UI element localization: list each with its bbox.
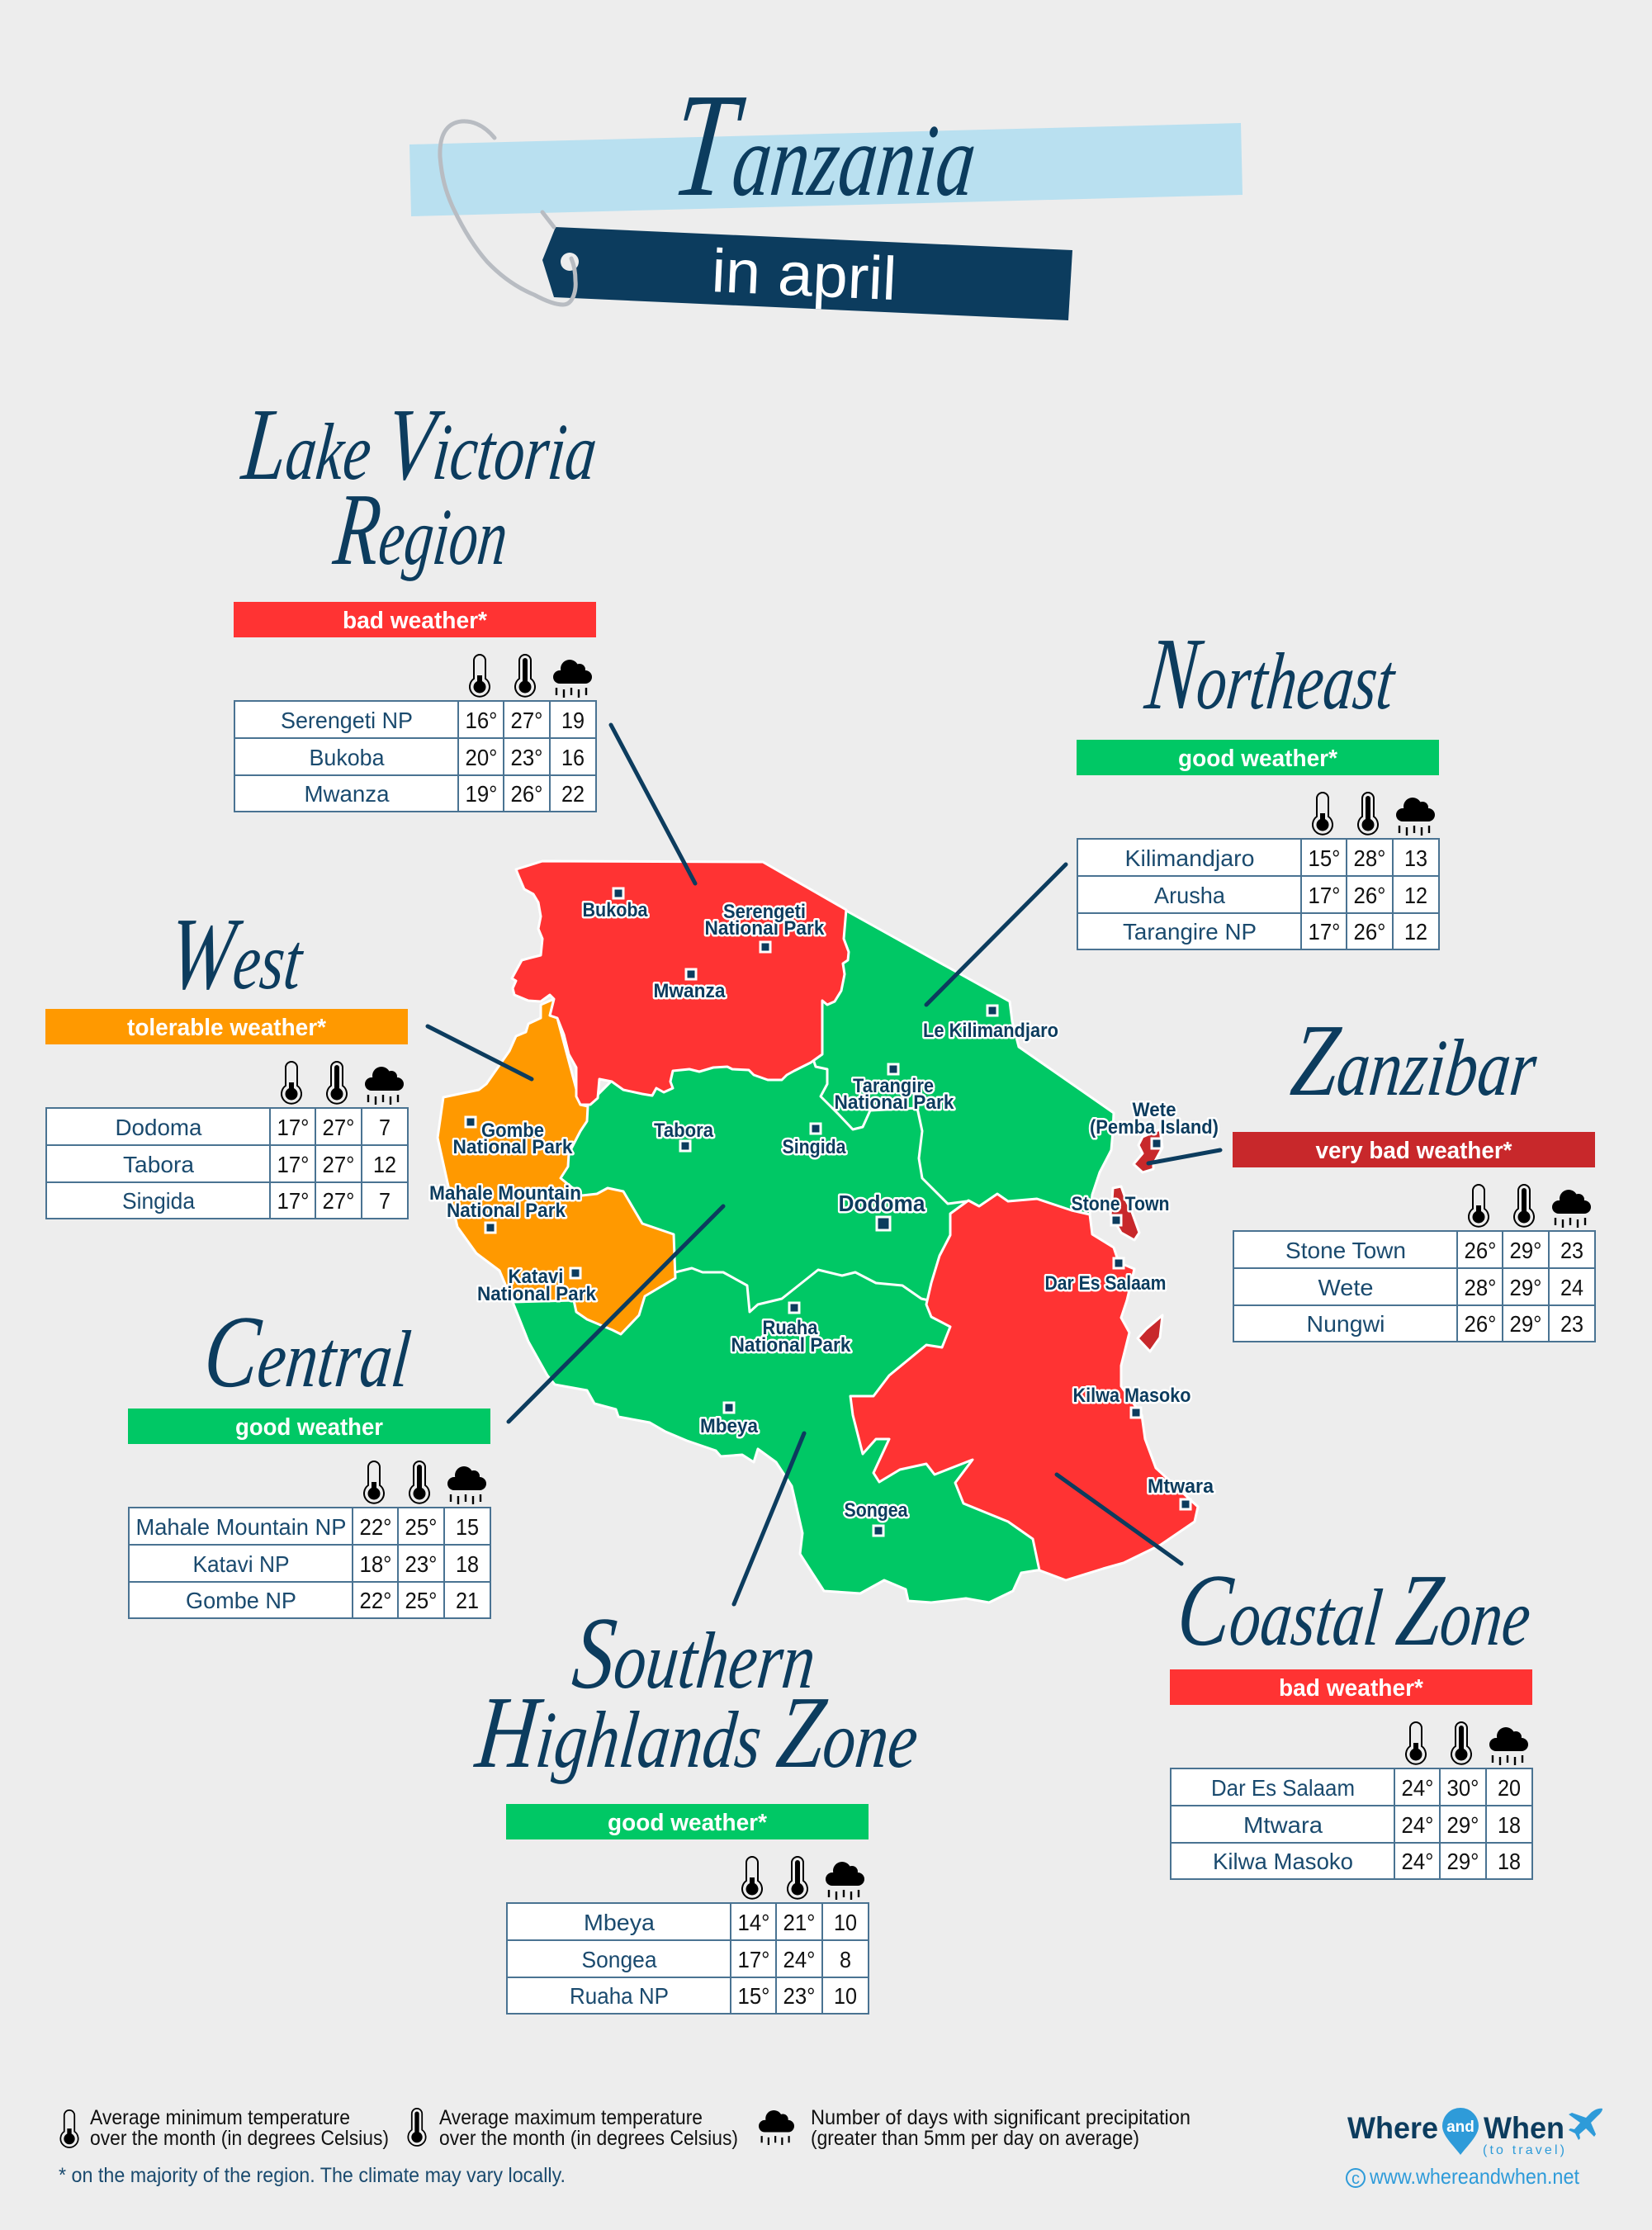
table: 25° (405, 1588, 438, 1613)
table: 27° (322, 1188, 355, 1214)
table: 20 (1498, 1775, 1521, 1801)
table: 17° (277, 1188, 309, 1214)
city: Katavi National Park: Katavi (509, 1266, 563, 1288)
heading: Zanzibar: Zanzibar (1286, 1003, 1543, 1118)
table: 15 (456, 1514, 479, 1540)
region borders: green inner (675, 1059, 967, 1312)
map of Tanzania (429, 861, 1219, 1603)
heading: Central: Central (199, 1295, 417, 1409)
city: Tarangire National Park (834, 1064, 954, 1114)
logo: Where and When (1347, 2108, 1602, 2189)
arrow: Lake Victoria (611, 725, 695, 883)
heading: Coastal Zone: Coastal Zone (1172, 1553, 1537, 1668)
tag hole (561, 253, 579, 271)
city: Stone Town: Stone Town (1072, 1193, 1169, 1215)
city: Wete: Wete (1133, 1099, 1176, 1121)
table: 22 (561, 781, 585, 807)
legend text: rain days (811, 2106, 1190, 2150)
legend text: rain days: (greater than 5mm per day on average) (811, 2127, 1139, 2150)
table: Kilimandjaro (1124, 845, 1255, 871)
table: 17° (277, 1152, 309, 1177)
title block (409, 63, 1243, 320)
footnote: * on the majority of the region. The climate may vary locally. (59, 2164, 566, 2187)
title: Tanzania: Tanzania (665, 63, 986, 228)
table: 16° (466, 708, 497, 733)
panel: Zanzibar (1233, 1132, 1595, 1342)
heading: Southern Highlands Zone: Highlands Zone (470, 1675, 925, 1790)
table: 14° (738, 1910, 769, 1935)
table: 10 (834, 1910, 857, 1935)
table: 17° (1308, 883, 1341, 908)
logo word: Where: Where (1347, 2111, 1438, 2145)
legend text: maximum temperature: over the month (in degrees Celsius) (439, 2127, 738, 2150)
table: 10 (834, 1983, 857, 2009)
icon: minimum temperature (60, 2110, 78, 2147)
city: Gombe National Park: National Park (452, 1136, 573, 1158)
table: Mtwara (1243, 1812, 1323, 1838)
table: 22° (360, 1588, 391, 1613)
table: 20° (466, 745, 497, 770)
city: Dodoma: Dodoma (839, 1191, 925, 1216)
icon: plane (1569, 2109, 1602, 2140)
table: Singida (122, 1188, 195, 1214)
table: 23 (1560, 1238, 1583, 1263)
rating banner (1233, 1132, 1595, 1167)
city: Singida (783, 1124, 846, 1158)
website: www.whereandwhen.net (1369, 2164, 1580, 2189)
table: Mahale Mountain NP (135, 1514, 347, 1540)
table: 18 (1498, 1812, 1521, 1838)
region: coastal red (850, 1194, 1198, 1580)
region: lake victoria red (512, 861, 849, 1105)
table: Dodoma (116, 1115, 202, 1140)
heading: Lake Victoria Region (237, 387, 604, 587)
table: 30° (1446, 1775, 1479, 1801)
table: Tabora (123, 1152, 194, 1177)
rating banner (128, 1409, 490, 1444)
logo tagline: (to travel) (1483, 2143, 1564, 2157)
heading: Southern Highlands Zone (470, 1596, 925, 1790)
city: Ruaha National Park: National Park (731, 1334, 851, 1356)
table: Tarangire NP (1123, 919, 1257, 945)
table (1171, 1768, 1532, 1879)
table (46, 1108, 408, 1219)
city: Dar Es Salaam (1045, 1258, 1166, 1295)
table: Ruaha NP (570, 1983, 669, 2009)
table: 29° (1446, 1812, 1479, 1838)
table: 18 (1498, 1849, 1521, 1874)
table: 26° (1354, 919, 1385, 945)
table: 12 (373, 1152, 396, 1177)
rating banner: good weather (235, 1414, 383, 1441)
icons (1313, 793, 1435, 836)
heading: Northeast: Northeast (1140, 617, 1403, 731)
table: 12 (1404, 919, 1427, 945)
legend (59, 2106, 1190, 2187)
luggage tag (542, 227, 1072, 320)
table: 12 (1404, 883, 1427, 908)
table: Kilwa Masoko (1213, 1849, 1353, 1874)
arrow: Zanzibar (1148, 1150, 1220, 1163)
table: Arusha (1154, 883, 1225, 908)
rating banner: bad weather* (1279, 1675, 1424, 1702)
table: 7 (379, 1188, 391, 1214)
city: Le Kilimandjaro (923, 1006, 1058, 1042)
title band (409, 123, 1243, 216)
rating banner: bad weather* (343, 608, 488, 634)
legend text: rain days: Number of days with significant precipitation (811, 2106, 1190, 2129)
region: west orange (438, 999, 675, 1334)
legend text: minimum temperature: over the month (in degrees Celsius) (90, 2127, 389, 2150)
table: Songea (581, 1947, 657, 1972)
table: Wete (1318, 1275, 1374, 1300)
city: Mwanza: Mwanza (654, 980, 726, 1002)
table: 18° (360, 1551, 391, 1577)
rating banner: good weather* (1178, 746, 1338, 772)
icons (364, 1461, 486, 1504)
rating banner: very bad weather* (1316, 1138, 1512, 1164)
table: 22° (360, 1514, 391, 1540)
icons (1406, 1722, 1528, 1765)
city: Kilwa Masoko: Kilwa Masoko (1073, 1385, 1190, 1407)
arrow: Northeast (926, 864, 1066, 1005)
table: 26° (1465, 1238, 1496, 1263)
table: 18 (456, 1551, 479, 1577)
city: Le Kilimandjaro: Le Kilimandjaro (923, 1020, 1058, 1042)
city: Kilwa Masoko (1073, 1385, 1190, 1418)
city: Mahale Mountain National Park: Mahale Mountain (429, 1182, 581, 1205)
table: Dar Es Salaam (1211, 1775, 1355, 1801)
rating banner (234, 602, 596, 637)
arrow: Southern Highlands (734, 1433, 804, 1604)
table: 26° (1465, 1311, 1496, 1337)
city: Tabora (654, 1120, 714, 1151)
table: 29° (1446, 1849, 1479, 1874)
table: 26° (510, 781, 543, 807)
city: Mtwara (1148, 1475, 1214, 1509)
table: Mwanza (304, 781, 390, 807)
table: 17° (277, 1115, 309, 1140)
logo word: When: When (1484, 2111, 1564, 2145)
panel: Coastal (1170, 1669, 1532, 1879)
table: 29° (1509, 1238, 1542, 1263)
arrow: West (428, 1026, 532, 1079)
table: 27° (510, 708, 543, 733)
subtitle: in april: in april (710, 236, 898, 313)
panel: Southern Highlands (506, 1804, 869, 2014)
table: Stone Town (1285, 1238, 1406, 1263)
city: Bukoba (583, 888, 648, 921)
table (1077, 839, 1439, 949)
table: 21° (783, 1910, 816, 1935)
icons (1469, 1185, 1591, 1228)
table (1233, 1231, 1595, 1342)
rating banner (1077, 740, 1439, 775)
city: Dar Es Salaam: Dar Es Salaam (1045, 1272, 1166, 1295)
city: Tarangire National Park: National Park (834, 1091, 954, 1114)
table: 28° (1465, 1275, 1496, 1300)
legend text: maximum temperature: Average maximum temperature (439, 2106, 703, 2129)
icon: copyright: c (1351, 2170, 1360, 2188)
table: 21 (456, 1588, 479, 1613)
table: Serengeti NP (281, 708, 413, 733)
panel: Northeast (1077, 740, 1439, 949)
table (507, 1903, 869, 2014)
table: 29° (1509, 1275, 1542, 1300)
table: 24 (1560, 1275, 1583, 1300)
table (129, 1508, 490, 1618)
table: Katavi NP (193, 1551, 289, 1577)
table: 26° (1354, 883, 1385, 908)
arrow: Coastal (1057, 1475, 1181, 1564)
table: 13 (1404, 845, 1427, 871)
legend text: maximum temperature (439, 2106, 738, 2150)
panel: Lake Victoria (234, 602, 596, 812)
table: Mbeya (584, 1910, 655, 1935)
table: 19 (561, 708, 585, 733)
legend text: minimum temperature: Average minimum temperature (90, 2106, 350, 2129)
table: 23° (783, 1983, 816, 2009)
city: Wete: (Pemba Island) (1090, 1116, 1219, 1139)
table: 17° (1308, 919, 1341, 945)
table: 8 (840, 1947, 851, 1972)
table: 28° (1354, 845, 1385, 871)
city: Singida: Singida (783, 1136, 846, 1158)
heading: Lake Victoria Region: Region (329, 472, 514, 587)
legend text: minimum temperature (90, 2106, 389, 2150)
city: Mbeya (700, 1403, 759, 1437)
city: Dodoma (839, 1191, 925, 1230)
icon: rain days (759, 2110, 794, 2145)
city: Katavi National Park: National Park (477, 1283, 597, 1305)
table: 7 (379, 1115, 391, 1140)
city: Wete (1090, 1099, 1219, 1148)
city: Katavi National Park (477, 1266, 597, 1305)
city: Bukoba: Bukoba (583, 899, 648, 921)
city: Mbeya: Mbeya (700, 1415, 759, 1437)
city: Ruaha National Park (731, 1303, 851, 1356)
leader lines (428, 725, 1220, 1604)
table: 23° (510, 745, 543, 770)
city: Serengeti National Park: Serengeti (723, 901, 806, 923)
city: Songea (844, 1499, 908, 1536)
icon: maximum temperature (408, 2109, 426, 2146)
table: 25° (405, 1514, 438, 1540)
table: Nungwi (1306, 1311, 1385, 1337)
city: Mwanza (654, 969, 726, 1002)
table: 16 (561, 745, 585, 770)
city: Stone Town (1072, 1193, 1169, 1225)
city: Gombe National Park: Gombe (481, 1120, 544, 1142)
icon: map pin (1442, 2108, 1479, 2155)
rating banner: tolerable weather* (127, 1015, 327, 1041)
table: 19° (466, 781, 497, 807)
panel: Central (128, 1409, 490, 1618)
table: 24° (1402, 1775, 1433, 1801)
city: Gombe National Park (452, 1117, 573, 1158)
heading: West: West (163, 897, 310, 1011)
table (234, 701, 596, 812)
table: 27° (322, 1152, 355, 1177)
rating banner: good weather* (608, 1810, 768, 1836)
tag string (440, 121, 575, 305)
icon: map pin: and (1446, 2119, 1474, 2136)
table: 23 (1560, 1311, 1583, 1337)
city: Serengeti National Park (705, 901, 825, 952)
panel: West (45, 1009, 408, 1219)
city: Tabora: Tabora (654, 1120, 714, 1142)
rating banner (45, 1009, 408, 1044)
table: 29° (1509, 1311, 1542, 1337)
icons (282, 1062, 404, 1105)
city: Ruaha National Park: Ruaha (763, 1317, 818, 1339)
table: 27° (322, 1115, 355, 1140)
table: 15° (738, 1983, 769, 2009)
island: Pemba (1134, 1129, 1162, 1172)
icon: copyright (1347, 2169, 1365, 2188)
city: Mahale Mountain National Park (429, 1182, 581, 1233)
city: Songea: Songea (844, 1499, 908, 1522)
table: 15° (1308, 845, 1341, 871)
rating banner (506, 1804, 869, 1839)
rating banner (1170, 1669, 1532, 1705)
table: Bukoba (309, 745, 385, 770)
island: Mafia (1138, 1315, 1162, 1352)
city: Tarangire National Park: Tarangire (853, 1075, 934, 1097)
table: 24° (1402, 1849, 1433, 1874)
table: Gombe NP (186, 1588, 296, 1613)
table: 17° (738, 1947, 769, 1972)
city: Mahale Mountain National Park: National Park (447, 1200, 566, 1222)
table: 24° (1402, 1812, 1433, 1838)
city: Mtwara: Mtwara (1148, 1475, 1214, 1498)
heading: Lake Victoria Region: Lake Victoria (237, 387, 604, 502)
icons (742, 1857, 864, 1900)
island: Zanzibar (1110, 1186, 1139, 1240)
heading: Southern Highlands Zone: Southern (568, 1596, 822, 1711)
city: Serengeti National Park: National Park (705, 917, 825, 940)
region: green zones (513, 911, 1114, 1603)
table: 24° (783, 1947, 816, 1972)
table: 23° (405, 1551, 438, 1577)
arrow: Central (509, 1206, 723, 1422)
icons (470, 655, 592, 698)
